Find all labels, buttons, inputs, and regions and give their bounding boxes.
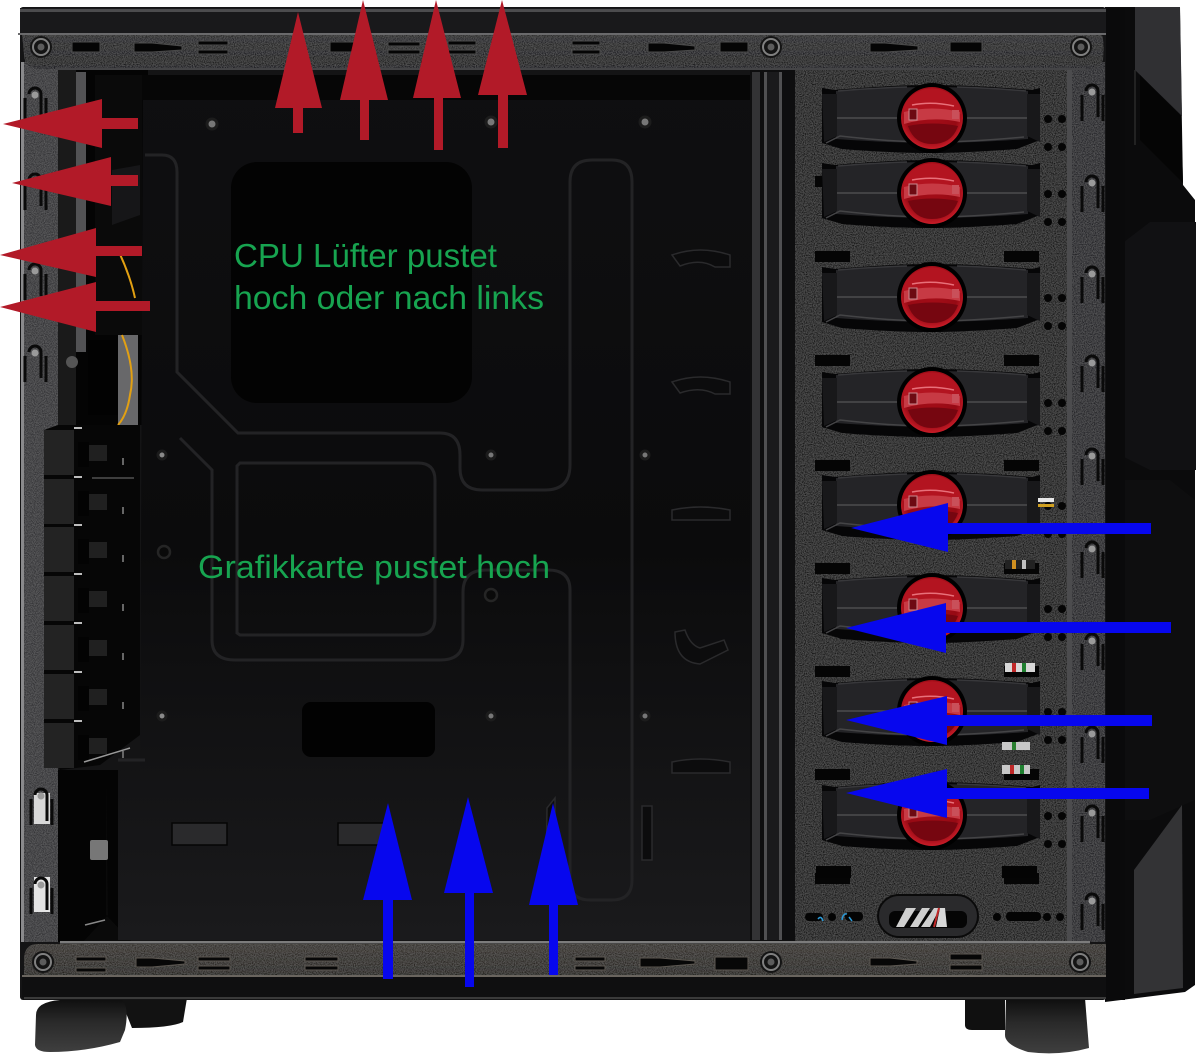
label: CPU fan: CPU Lüfter pustet	[234, 237, 497, 274]
centre pillar	[750, 70, 796, 942]
expansion slot covers	[44, 425, 140, 770]
arrow up 3	[413, 0, 461, 150]
bottom rail	[22, 941, 1106, 999]
arrow up 2	[340, 0, 388, 140]
CPU cutout	[231, 162, 472, 403]
drive bay 6	[815, 573, 1066, 677]
drive bay 2	[815, 158, 1066, 262]
left rail	[21, 62, 58, 942]
arrow intake 4	[846, 769, 1149, 818]
arrow intake 1	[851, 503, 1151, 552]
drive bay plate	[795, 70, 1067, 942]
arrow bottom 2	[444, 797, 493, 987]
arrows: red exhaust rear	[0, 99, 150, 332]
arrow up 4	[478, 0, 527, 148]
motherboard tray	[118, 75, 752, 940]
top rail	[18, 33, 1106, 70]
drive bay 8	[815, 780, 1066, 884]
arrow intake 2	[846, 603, 1171, 653]
cable pass-through grommet	[878, 895, 978, 937]
drive bay 3	[815, 262, 1066, 366]
arrows: red exhaust top	[275, 0, 527, 150]
arrow left 2	[12, 157, 138, 206]
lower plate holes	[805, 866, 1064, 921]
arrow bottom 1	[363, 803, 412, 979]
front foot left	[35, 998, 127, 1052]
cable tie clips	[172, 250, 730, 880]
arrows: blue intake bottom	[363, 797, 578, 987]
coloured wires behind bay slots	[1002, 498, 1054, 774]
rear section interior	[58, 70, 148, 945]
arrow left 1	[3, 99, 138, 148]
standoffs	[158, 117, 650, 720]
arrow bottom 3	[529, 803, 578, 975]
label: CPU fan second line: hoch oder nach links	[234, 279, 544, 316]
arrow left 3	[0, 228, 142, 277]
front bezel	[1105, 7, 1196, 1002]
rear feet	[120, 998, 1005, 1030]
rear fan and wire	[66, 75, 142, 425]
drive bay 5	[815, 470, 1066, 574]
arrow up 1	[275, 12, 322, 133]
right rail	[1067, 62, 1105, 942]
arrow intake 3	[846, 696, 1152, 745]
arrow left 4	[0, 282, 150, 332]
drive bay 4	[815, 367, 1066, 471]
front foot right	[1005, 998, 1089, 1053]
tray embossing	[118, 155, 632, 900]
drive bay 7	[815, 676, 1066, 780]
lower cable cutout	[302, 702, 435, 757]
arrows: blue intake front	[846, 503, 1171, 818]
label: graphics card: Grafikkarte pustet hoch	[198, 549, 550, 585]
drive bay 1	[815, 83, 1066, 187]
